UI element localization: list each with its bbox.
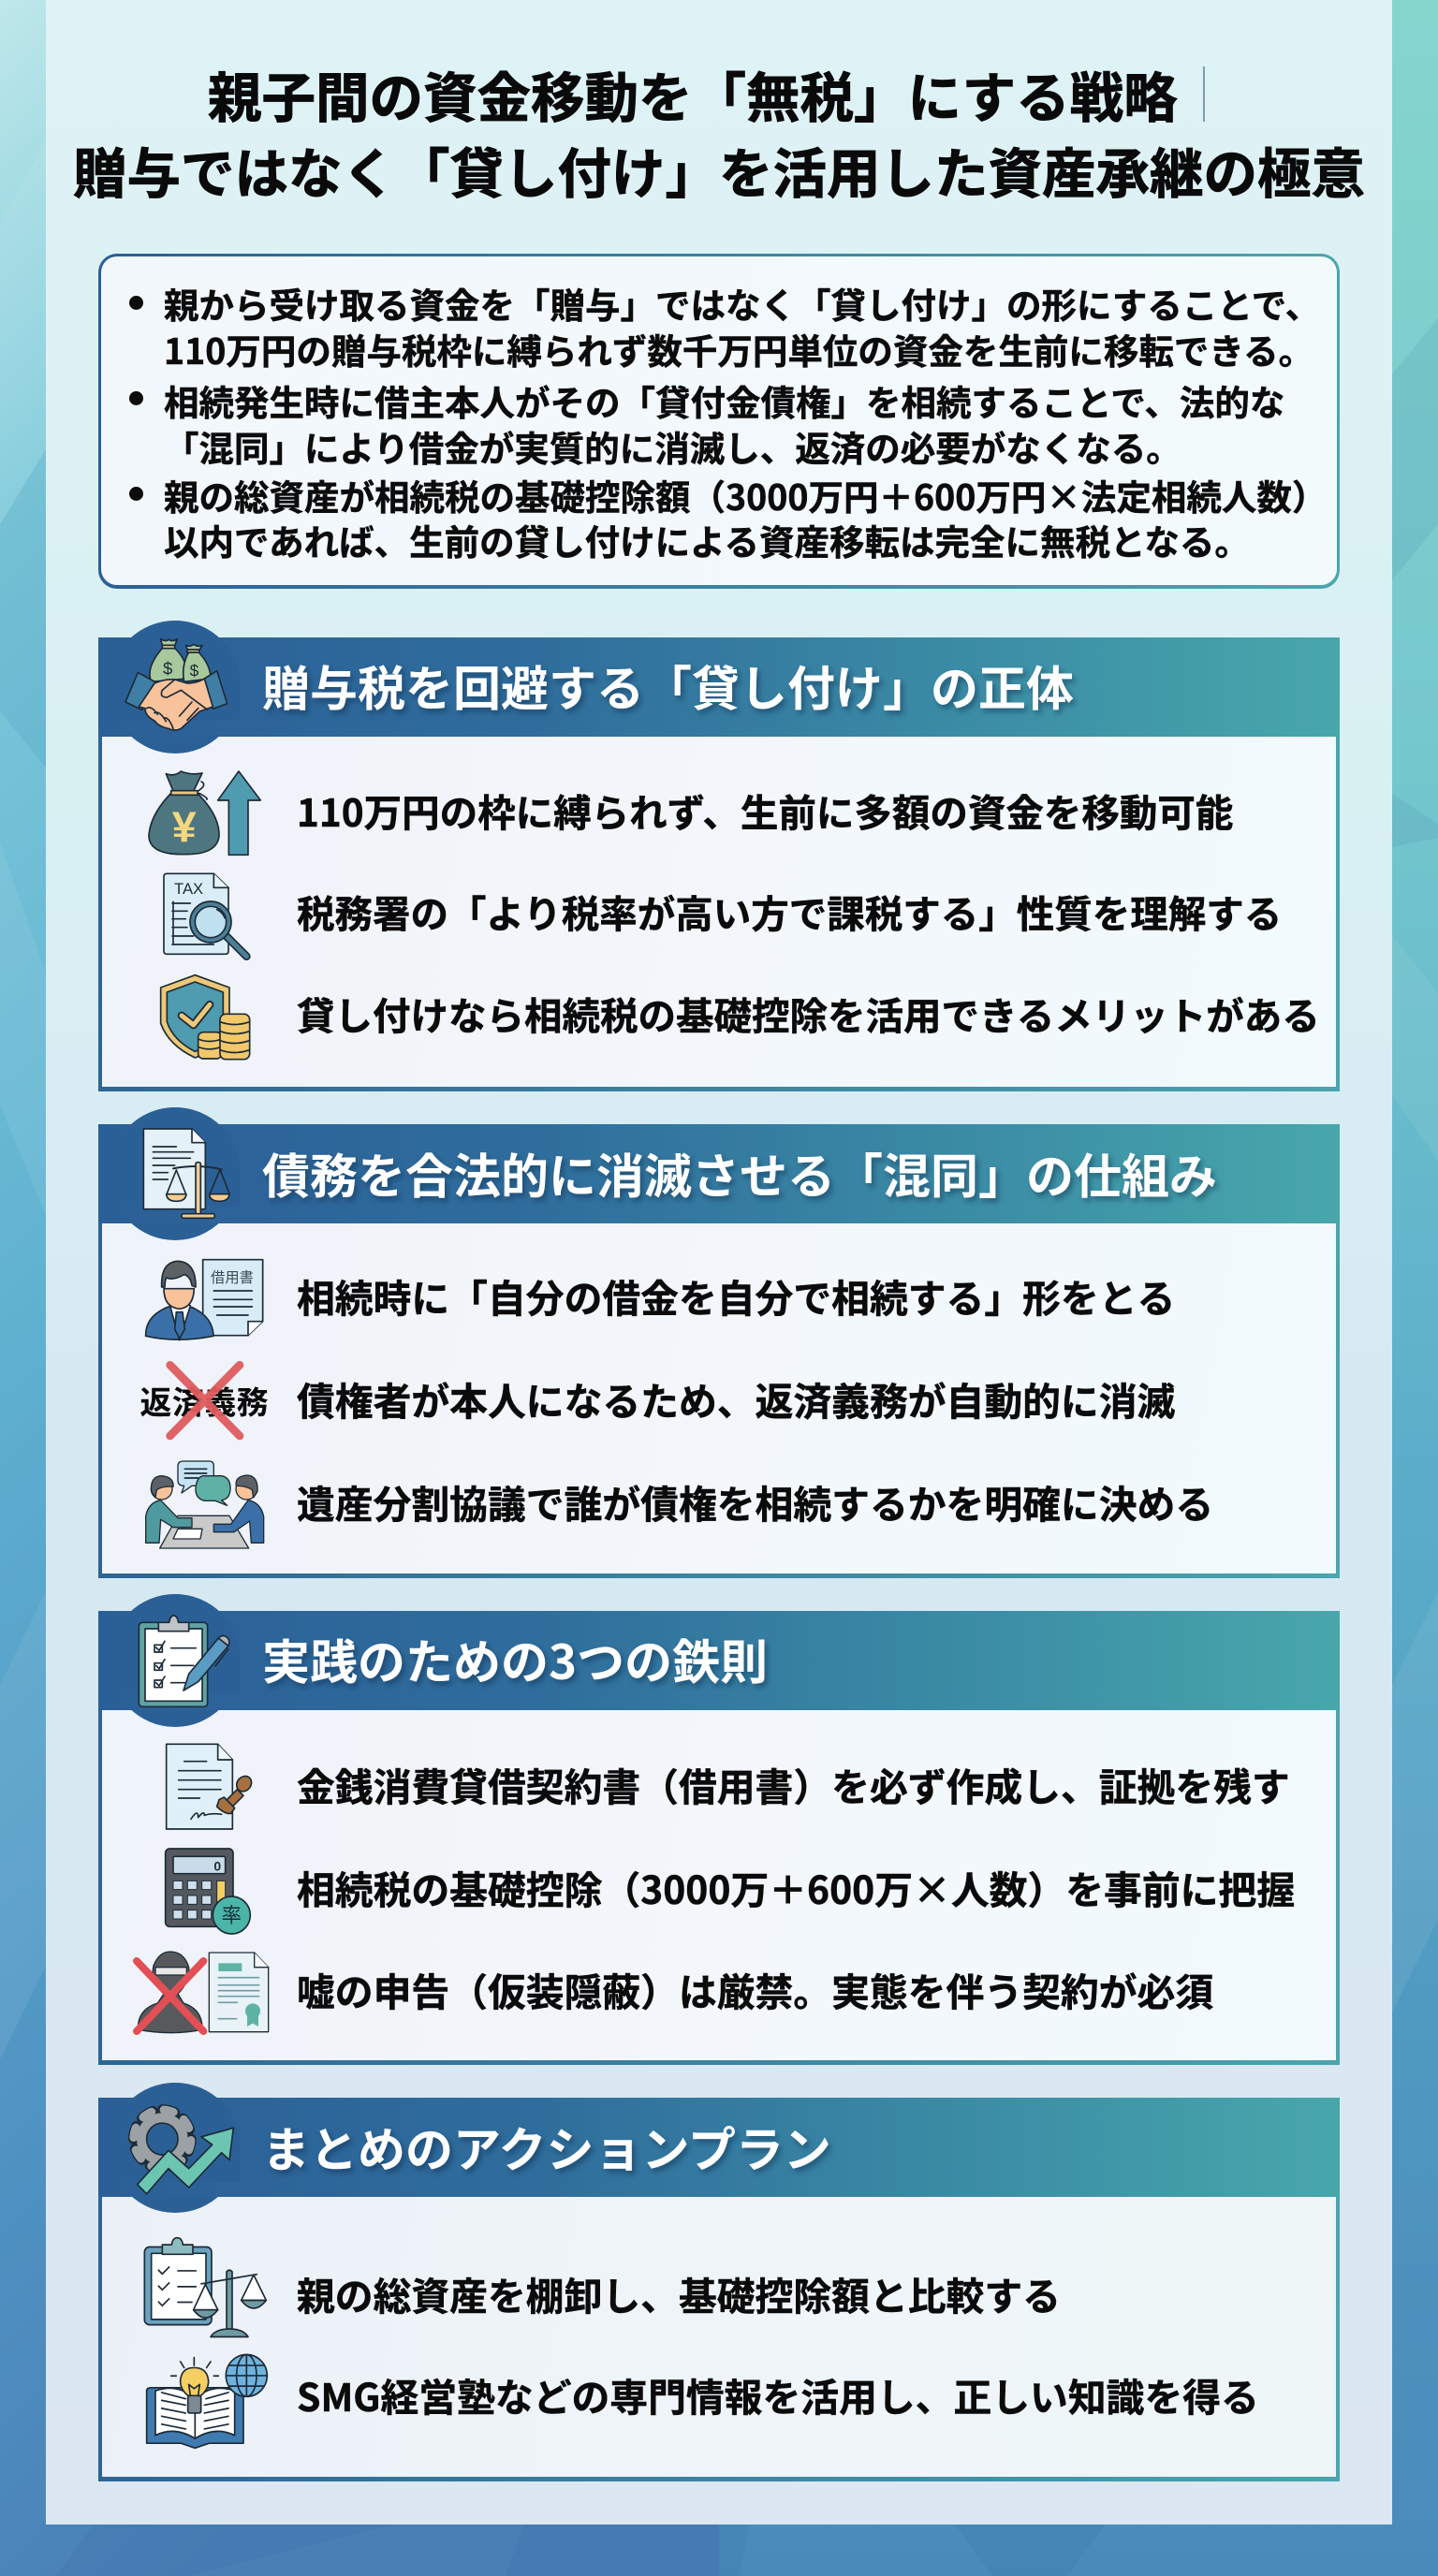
icon: person and loan note [146, 1260, 263, 1340]
summary box: 親の総資産が相続税の基礎控除額（3000万円＋600万円×法定相続人数） [164, 469, 1327, 520]
row text: 親の総資産を棚卸し、基礎控除額と比較する [297, 2266, 1061, 2321]
icon: calculator [166, 1849, 250, 1934]
icon: money bags and handshake [125, 639, 227, 730]
row text: 相続税の基礎控除（3000万＋600万×人数）を事前に把握 [297, 1860, 1295, 1915]
row text: 嘘の申告（仮装隠蔽）は厳禁。実態を伴う契約が必須 [297, 1962, 1213, 2017]
heading: 贈与税を回避する「貸し付け」の正体 [262, 651, 1074, 720]
icon: crossed out repayment duty: 返済義務 [139, 1378, 269, 1424]
summary box: 以内であれば、生前の貸し付けによる資産移転は完全に無税となる。 [164, 514, 1250, 565]
row text: SMG経営塾などの専門情報を活用し、正しい知識を得る [297, 2367, 1259, 2422]
panel: three rules [98, 1611, 1340, 2065]
row text: 遺産分割協議で誰が債権を相続するかを明確に決める [297, 1474, 1213, 1530]
icon: calculator: 率 [222, 1899, 242, 1928]
heading: 実践のための3つの鉄則 [262, 1624, 768, 1693]
icons [128, 2104, 268, 2449]
icon: crossed out fraudster and certificate [137, 1952, 269, 2033]
icon: contract and scales [143, 1129, 229, 1218]
row text: 貸し付けなら相続税の基礎控除を活用できるメリットがある [297, 986, 1320, 1041]
row text: 税務署の「より税率が高い方で課税する」性質を理解する [297, 884, 1282, 939]
icon: tax document magnifier [164, 873, 246, 957]
icons [125, 638, 262, 1060]
icon: checklist and pen [139, 1616, 229, 1706]
summary box [98, 254, 1340, 589]
row text: 債権者が本人になるため、返済義務が自動的に消滅 [297, 1371, 1175, 1427]
icon: contract with stamp [167, 1744, 255, 1829]
icons [139, 1128, 269, 1549]
heading: まとめのアクションプラン [262, 2112, 831, 2181]
row text: 相続時に「自分の借金を自分で相続する」形をとる [297, 1268, 1175, 1324]
title [73, 54, 1365, 209]
title: 親子間の資金移動を「無税」にする戦略 [208, 54, 1178, 133]
icon: meeting [146, 1461, 264, 1548]
icon: money bags and handshake: $ [190, 662, 199, 681]
icon: tax document magnifier: TAX [174, 880, 203, 898]
heading: 債務を合法的に消滅させる「混同」の仕組み [262, 1138, 1217, 1208]
row text: 110万円の枠に縛られず、生前に多額の資金を移動可能 [297, 783, 1233, 838]
icon: person and loan note: 借用書 [211, 1266, 254, 1287]
panel: merger mechanism [98, 1124, 1340, 1578]
icon: money bags and handshake: $ [163, 659, 173, 679]
icon: calculator: 0 [213, 1858, 221, 1873]
summary box: 親から受け取る資金を「贈与」ではなく「貸し付け」の形にすることで、 [164, 277, 1320, 329]
icon: yen bag with arrow: ¥ [172, 802, 197, 851]
icon: shield and coins [161, 975, 250, 1060]
icon: gear and growth arrow [134, 2110, 233, 2194]
icon: book, light bulb and globe [147, 2355, 267, 2448]
panel: gift tax avoidance [98, 637, 1340, 1091]
row text: 金銭消費貸借契約書（借用書）を必ず作成し、証拠を残す [297, 1757, 1290, 1812]
icon: crossed out repayment duty [139, 1365, 269, 1436]
title: 贈与ではなく「貸し付け」を活用した資産承継の極意 [73, 130, 1365, 209]
summary box: 「混同」により借金が実質的に消滅し、返済の必要がなくなる。 [164, 420, 1181, 472]
icon: yen bag with arrow [149, 771, 260, 855]
icons [133, 1615, 270, 2035]
summary box: 110万円の贈与税枠に縛られず数千万円単位の資金を生前に移転できる。 [164, 323, 1313, 374]
summary box: 相続発生時に借主本人がその「貸付金債権」を相続することで、法的な [164, 374, 1284, 426]
panel: action plan [98, 2098, 1340, 2481]
icon: checklist and scales [144, 2238, 266, 2337]
